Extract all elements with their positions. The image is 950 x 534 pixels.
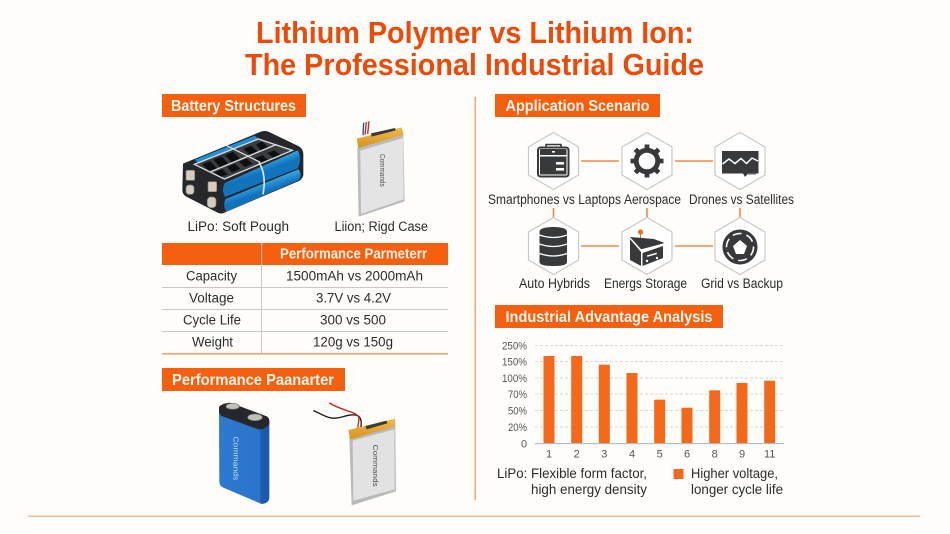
- row: weight: [192, 334, 393, 350]
- row: capacity: 1500mAh vs 2000mAh: [286, 268, 423, 284]
- panel: application scenario: [488, 94, 794, 291]
- row: cycle life: 300 vs 500: [320, 312, 386, 328]
- title: The Professional Industrial Guide: [245, 47, 704, 82]
- label: auto hybrids: Auto Hybrids: [519, 276, 590, 291]
- label: LiPo: LiPo: Soft Pough: [188, 219, 289, 234]
- image: blue prismatic cell: Commands: [232, 436, 241, 481]
- label: aerospace: Aerospace: [624, 192, 681, 207]
- image: pouch cell with wires: [313, 403, 396, 505]
- label: drones vs satellites: Drones vs Satellites: [689, 192, 794, 207]
- bar chart: 250%: [502, 340, 527, 352]
- heading: performance: [162, 368, 345, 391]
- icon: database: [540, 227, 567, 266]
- bar chart: 150%: [502, 356, 527, 368]
- panel: parameter table: [162, 243, 448, 355]
- row: cycle life: [183, 312, 386, 328]
- bar chart: 8: [712, 448, 718, 460]
- bar chart: 70%: [508, 389, 527, 401]
- heading: battery structures: [162, 94, 306, 117]
- image: silver pouch cell: Commands: [378, 154, 387, 187]
- image: LiPo battery pack: [182, 131, 303, 214]
- legend: LiPo: high energy density: [531, 482, 647, 497]
- legend: LiPo: LiPo: Flexible form factor,: [497, 466, 647, 481]
- icon: monitor chart: [722, 151, 758, 177]
- heading: battery structures: Battery Structures: [171, 98, 296, 115]
- panel: industrial advantage analysis: [495, 305, 784, 497]
- bar chart: 11: [764, 448, 775, 460]
- icon: device case: [538, 144, 568, 176]
- heading: industrial advantage: Industrial Advantage Analysis: [506, 309, 713, 326]
- label: smartphones vs laptops: Smartphones vs Laptops: [488, 192, 621, 207]
- bar chart: 3: [601, 448, 607, 460]
- icon: energy storage box: [630, 229, 664, 266]
- panel: performance batteries: [162, 368, 396, 505]
- icon: gear: [630, 144, 664, 178]
- label: grid vs backup: Grid vs Backup: [701, 276, 783, 291]
- row: capacity: Capacity: [186, 268, 237, 284]
- row: weight: 120g vs 150g: [313, 334, 393, 350]
- heading: application scenario: [495, 94, 660, 117]
- image: pouch cell with wires: Commands: [371, 445, 380, 487]
- bar chart: 9: [739, 448, 745, 460]
- title: [245, 15, 704, 82]
- bar chart: 2: [574, 448, 580, 460]
- heading: performance: Performance Paanarter: [172, 372, 334, 389]
- bar chart: 0: [521, 438, 527, 450]
- divider: center: [474, 97, 476, 500]
- table header: Performance Parmeterr: [280, 246, 427, 262]
- title: Lithium Polymer vs Lithium Ion:: [256, 15, 694, 50]
- icon: wheel: [724, 230, 756, 264]
- panel: battery structures: [162, 94, 428, 234]
- row: voltage: Voltage: [189, 290, 234, 306]
- legend: Liion: Higher voltage,: [691, 466, 778, 481]
- row: cycle life: Cycle Life: [183, 312, 241, 328]
- divider: footer: [28, 516, 920, 517]
- legend: Liion: longer cycle life: [691, 482, 783, 497]
- bar chart: 100%: [502, 373, 527, 385]
- legend: Liion: [674, 466, 783, 497]
- row: capacity: [186, 268, 423, 284]
- table header: [162, 243, 448, 265]
- legend: LiPo: [497, 466, 647, 497]
- bar chart: 4: [629, 448, 635, 460]
- bar chart: 20%: [508, 422, 527, 434]
- label: Liion: Liion; Rigd Case: [334, 219, 428, 234]
- label: energy storage: Energs Storage: [604, 276, 687, 291]
- heading: industrial advantage: [495, 305, 723, 328]
- image: silver pouch cell: [357, 121, 405, 217]
- row: voltage: [189, 290, 391, 306]
- bar chart: [502, 340, 784, 460]
- row: weight: Weight: [192, 334, 233, 350]
- bar chart: 6: [684, 448, 690, 460]
- bar chart: 1: [546, 448, 552, 460]
- row: voltage: 3.7V vs 4.2V: [316, 290, 391, 306]
- bar chart: 50%: [508, 406, 527, 418]
- heading: application scenario: Application Scenario: [506, 98, 650, 115]
- bar chart: 5: [657, 448, 663, 460]
- image: blue prismatic cell: [219, 403, 269, 504]
